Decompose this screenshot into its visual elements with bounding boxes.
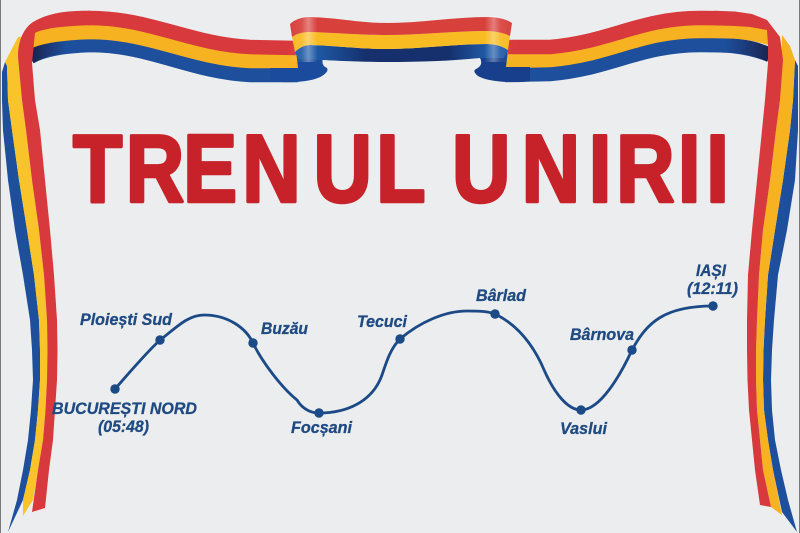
station: Bârnova: Bârnova (570, 326, 634, 344)
station: Iași: (12:11) (687, 280, 738, 298)
station: Focșani (291, 408, 352, 437)
station: Tecuci (357, 313, 407, 344)
banner blue band (295, 44, 508, 62)
ribbon: left hanging strip (2, 11, 90, 532)
station: Buzău (248, 320, 308, 348)
banner red band (290, 17, 512, 37)
station: Ploiești Sud (80, 311, 173, 345)
route map (52, 262, 738, 438)
right fold (474, 50, 530, 82)
station: Buzău: Buzău (261, 320, 308, 338)
station: Bârlad (476, 287, 527, 319)
station: Iași: IAȘI (696, 262, 726, 280)
station: București Nord (52, 384, 197, 436)
ribbon: top left strip (30, 18, 298, 75)
ribbon: centre banner with folded ends (270, 16, 530, 82)
station: Bârnova (570, 326, 637, 355)
ribbon: top right strip (505, 18, 770, 75)
left fold (270, 50, 327, 82)
station: Bârlad: Bârlad (476, 287, 527, 305)
station: Ploiești Sud: Ploiești Sud (80, 311, 173, 329)
station: Vaslui: Vaslui (560, 420, 607, 438)
banner sheen (288, 16, 514, 62)
title: TRENUL UNIRII (73, 115, 729, 222)
route line (115, 306, 713, 413)
station: Vaslui (560, 405, 607, 438)
ribbon: right hanging strip (715, 11, 798, 532)
station: București Nord: BUCUREȘTI NORD (52, 400, 197, 418)
station: Focșani: Focșani (291, 419, 352, 437)
station: București Nord: (05:48) (98, 418, 149, 436)
station: Tecuci: Tecuci (357, 313, 407, 331)
station: Iași (687, 262, 738, 311)
banner yellow band (292, 31, 510, 52)
